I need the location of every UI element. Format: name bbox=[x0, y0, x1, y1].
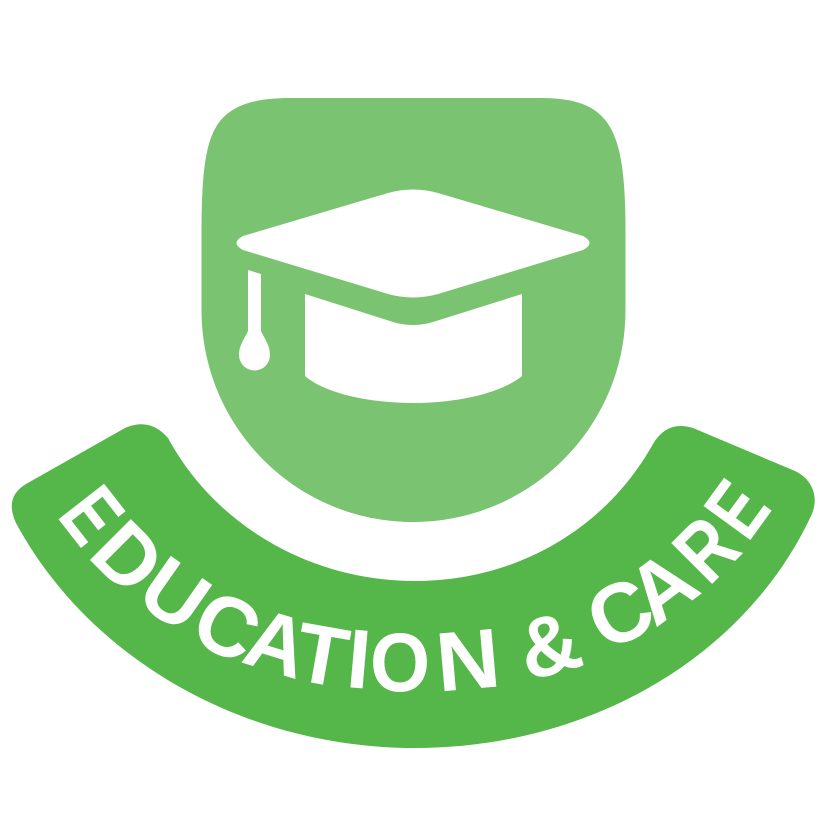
banner label: & bbox=[507, 591, 591, 699]
banner label: O bbox=[370, 616, 430, 710]
banner label: A bbox=[609, 531, 715, 643]
banner label: A bbox=[234, 589, 320, 697]
banner label: I bbox=[343, 611, 375, 707]
banner label: D bbox=[73, 502, 183, 612]
banner label: C bbox=[179, 570, 275, 682]
banner label: U bbox=[123, 538, 227, 650]
banner label bbox=[42, 464, 788, 710]
banner label: C bbox=[572, 557, 668, 669]
shield background bbox=[202, 98, 626, 522]
banner label: R bbox=[656, 499, 757, 600]
cap top board bbox=[236, 190, 590, 298]
ribbon banner bbox=[12, 424, 815, 748]
banner label: E bbox=[686, 464, 788, 554]
banner label: T bbox=[289, 604, 355, 706]
cap base bbox=[305, 294, 522, 403]
tassel bbox=[239, 270, 270, 370]
banner label: E bbox=[42, 469, 142, 561]
icon: graduation cap bbox=[236, 190, 590, 403]
banner label: N bbox=[432, 611, 504, 710]
